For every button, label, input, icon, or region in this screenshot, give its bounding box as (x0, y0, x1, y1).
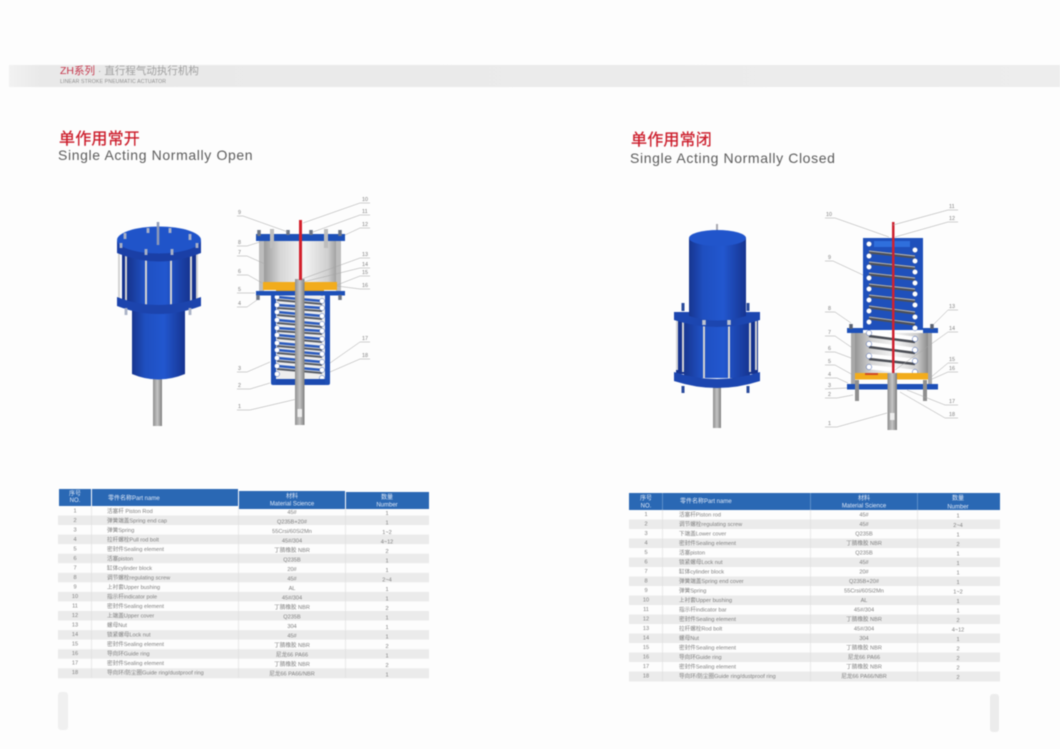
table rows: 45# (859, 560, 870, 566)
table header: 数量 (381, 493, 393, 501)
table rows: 尼龙66 PA66 (848, 653, 880, 661)
table rows: 密封件Sealing element (679, 644, 736, 652)
part callouts: normally open: 12 (362, 222, 368, 228)
part callouts: normally open: 16 (362, 283, 368, 289)
cutaway diagram: normally closed actuator (847, 222, 938, 430)
table header: 材料 (858, 494, 870, 502)
table rows: 指示杆indicator bar (679, 606, 727, 614)
part callouts: normally open: 6 (238, 269, 241, 275)
part callouts: normally open: 9 (238, 210, 241, 216)
table header: 材料 (286, 492, 298, 500)
part callouts: normally closed: 17 (949, 399, 955, 405)
table rows: 15 (72, 642, 78, 648)
table rows: 尼龙66 PA66/NBR (269, 670, 315, 678)
table rows: 45# (859, 512, 870, 518)
table rows: 2 (385, 644, 389, 650)
table rows: 45# (287, 510, 298, 516)
table rows: 弹簧Spring (107, 526, 134, 534)
table rows: 55Crsi/60Si2Mn (272, 529, 312, 535)
table rows: 尼龙66 PA66 (276, 650, 308, 658)
header subtitle: LINEAR STROKE PNEUMATIC ACTUATOR (60, 79, 166, 85)
table header: Material Science (270, 502, 315, 508)
table header: Number (947, 504, 969, 510)
table header (629, 493, 1000, 510)
table rows: 2 (956, 675, 960, 681)
table rows: 45#/304 (282, 538, 302, 544)
table rows: 1 (385, 672, 389, 678)
table header: NO. (70, 498, 81, 504)
table rows: 丁腈橡胶 NBR (274, 660, 310, 668)
table rows: 丁腈橡胶 NBR (274, 546, 310, 554)
table rows: 丁腈橡胶 NBR (846, 539, 882, 547)
part callouts: normally open: 13 (362, 252, 368, 258)
table header: NO. (641, 504, 652, 510)
table rows: 密封件Sealing element (107, 659, 164, 667)
table rows (58, 506, 429, 678)
table rows: Q235B (283, 614, 301, 620)
table rows: 8 (644, 578, 648, 584)
table rows: 1 (956, 552, 960, 558)
part callouts: normally open: 4 (238, 301, 241, 307)
table rows: 密封件Sealing element (107, 545, 164, 553)
table rows: 18 (72, 670, 78, 676)
table rows: 7 (644, 569, 648, 575)
part callouts: normally open: 15 (362, 270, 368, 276)
table rows: 上端盖Upper cover (107, 612, 154, 620)
table rows: 1 (956, 532, 960, 538)
table rows: AL (289, 586, 295, 592)
table rows: 9 (644, 588, 648, 594)
table rows: 密封件Sealing element (107, 602, 164, 610)
table rows: 1 (385, 634, 389, 640)
part callouts: normally open: 7 (238, 250, 241, 256)
table rows: 1 (73, 508, 77, 514)
heading: single acting normally closed: Single Acting Normally Closed (630, 150, 836, 166)
table rows: 11 (72, 604, 78, 610)
table rows: 2 (956, 542, 960, 548)
table rows: 4~12 (952, 628, 964, 634)
table rows: 2 (385, 606, 389, 612)
table rows: 4~12 (381, 540, 393, 546)
table rows: 9 (73, 584, 77, 590)
table rows: 4 (73, 537, 77, 543)
table rows: 45# (287, 634, 298, 640)
product photo: normally open actuator (117, 222, 201, 426)
table rows: 13 (643, 626, 649, 632)
table rows: 丁腈橡胶 NBR (274, 603, 310, 611)
table rows: 拉杆螺栓Rod bolt (679, 624, 723, 632)
table rows: 导向环Guide ring (679, 653, 722, 661)
table header (59, 489, 429, 509)
table rows: 12 (643, 616, 649, 622)
table rows: 缸体cylinder block (679, 568, 724, 576)
table rows: 2 (956, 666, 960, 672)
table rows: 17 (643, 664, 649, 670)
table rows: 4 (644, 540, 648, 546)
table rows: 2 (644, 522, 648, 528)
part callouts: normally open: 10 (362, 197, 368, 203)
table rows: 1 (956, 637, 960, 643)
part callouts: normally closed: 4 (828, 372, 831, 378)
part callouts: normally closed: 9 (828, 255, 831, 261)
heading: single acting normally open: Single Acting Normally Open (58, 147, 253, 163)
table rows: 拉杆螺栓Pull rod bolt (107, 536, 159, 544)
table rows: 活塞杆 Piston Rod (107, 507, 153, 515)
part callouts: normally open: 18 (362, 353, 368, 359)
part callouts: normally closed: 1 (828, 421, 831, 427)
table rows: 13 (72, 622, 78, 628)
table rows: 1 (385, 511, 389, 517)
part callouts: normally open: 3 (238, 366, 241, 372)
table rows: 17 (72, 660, 78, 666)
table rows: 活塞piston (679, 548, 705, 556)
part callouts: normally open: 11 (362, 209, 368, 215)
table rows: 丁腈橡胶 NBR (846, 662, 882, 670)
table rows: 导向环/防尘圈Guide ring/dustproof ring (107, 668, 204, 676)
table rows: 3 (644, 531, 648, 537)
table rows: 45#/304 (854, 608, 874, 614)
table rows: 弹簧Spring (679, 586, 706, 594)
table rows: 弹簧端盖Spring end cover (679, 577, 744, 585)
part callouts: normally closed: 8 (828, 306, 831, 312)
table rows: 上衬套Upper bushing (679, 596, 732, 604)
table rows: 16 (643, 654, 649, 660)
table rows: 导向环Guide ring (107, 650, 150, 658)
product photo: normally closed actuator (674, 224, 760, 428)
cutaway diagram: normally open actuator (256, 220, 345, 425)
part callouts: normally closed: 15 (949, 357, 955, 363)
table rows: 螺母Nut (679, 634, 699, 642)
table rows: 1 (644, 512, 648, 518)
table rows: 7 (73, 566, 77, 572)
table header: Material Science (842, 504, 887, 510)
table rows: 1 (385, 616, 389, 622)
table rows: 2 (385, 549, 389, 555)
table rows: 下端盖Lower cover (679, 530, 726, 538)
part callouts: normally closed: 3 (828, 383, 831, 389)
table rows: 5 (73, 546, 77, 552)
table rows: 2 (956, 656, 960, 662)
table rows: Q235B (855, 532, 873, 538)
parts table: normally open (58, 489, 429, 678)
part callouts: normally open: 2 (238, 383, 241, 389)
part callouts: normally closed: 16 (949, 366, 955, 372)
part callouts: normally closed: 10 (826, 212, 832, 218)
table rows: 锁紧螺母Lock nut (107, 630, 151, 638)
table rows: 45#/304 (282, 596, 302, 602)
table rows: 1 (956, 570, 960, 576)
heading: single acting normally closed: 单作用常闭 (631, 131, 712, 149)
table rows: 1 (385, 596, 389, 602)
table rows: 活塞杆Piston rod (679, 510, 721, 518)
table rows: 6 (73, 556, 77, 562)
table rows: 1 (385, 568, 389, 574)
table rows: 45#/304 (854, 626, 874, 632)
table header: 序号 (640, 494, 652, 502)
table rows: 1~2 (382, 530, 392, 536)
part callouts: normally open: 5 (238, 287, 241, 293)
table rows: 20# (859, 570, 870, 576)
part callouts: normally open (237, 197, 370, 410)
part callouts: normally closed: 18 (949, 412, 955, 418)
part callouts: normally open: 17 (362, 336, 368, 342)
table rows: 2 (385, 663, 389, 669)
table rows: 2~4 (953, 523, 963, 529)
table rows: 1 (385, 587, 389, 593)
part callouts: normally closed: 2 (828, 392, 831, 398)
table rows: 1 (956, 599, 960, 605)
table rows (629, 510, 1000, 682)
table rows: 8 (73, 575, 77, 581)
table rows: 密封件Sealing element (679, 615, 736, 623)
parts table: normally closed (629, 493, 1000, 682)
part callouts: normally closed: 12 (949, 216, 955, 222)
table rows: 15 (643, 645, 649, 651)
table rows: 丁腈橡胶 NBR (846, 615, 882, 623)
table rows: 1 (956, 608, 960, 614)
part callouts: normally closed: 11 (949, 204, 955, 210)
part callouts: normally closed: 7 (828, 330, 831, 336)
table rows: 10 (643, 598, 649, 604)
table rows: 活塞piston (107, 554, 133, 562)
table rows: 尼龙66 PA66/NBR (841, 672, 887, 680)
table rows: 2 (956, 618, 960, 624)
table rows: 18 (643, 674, 649, 680)
table rows: 锁紧螺母Lock nut (679, 558, 723, 566)
heading: single acting normally open (58, 130, 253, 163)
table rows: 20# (287, 567, 298, 573)
part callouts: normally closed: 13 (949, 304, 955, 310)
part callouts: normally open: 1 (238, 404, 241, 410)
table rows: 缸体cylinder block (107, 564, 152, 572)
part callouts: normally closed (825, 204, 958, 427)
page edge mark: left (58, 692, 68, 730)
table rows: 上衬套Upper bushing (107, 583, 160, 591)
part callouts: normally closed: 6 (828, 346, 831, 352)
table rows: Q235B+20# (277, 520, 308, 526)
table rows: 丁腈橡胶 NBR (846, 644, 882, 652)
table rows: 45# (287, 576, 298, 582)
table rows: 1 (385, 654, 389, 660)
table rows: 弹簧端盖Spring end cap (107, 516, 167, 524)
part callouts: normally open: 14 (362, 262, 368, 268)
table rows: 螺母Nut (107, 621, 127, 629)
table rows: 调节螺栓regulating screw (679, 520, 743, 528)
table rows: 55Crsi/60Si2Mn (844, 588, 884, 594)
table rows: 密封件Sealing element (679, 539, 736, 547)
table rows: Q235B (855, 550, 873, 556)
table rows: 2 (73, 518, 77, 524)
table rows: 10 (72, 594, 78, 600)
table rows: 1~2 (953, 590, 963, 596)
table rows: 304 (859, 636, 869, 642)
table rows: 1 (385, 558, 389, 564)
part callouts: normally closed: 14 (949, 326, 955, 332)
table rows: AL (861, 598, 867, 604)
part callouts: normally open: 8 (238, 240, 241, 246)
table rows: 1 (385, 625, 389, 631)
table rows: 密封件Sealing element (679, 662, 736, 670)
table rows: Q235B+20# (849, 579, 880, 585)
table rows: 1 (385, 520, 389, 526)
heading: single acting normally closed (630, 131, 836, 166)
header title: ZH系列 · 直行程气动执行机构 (60, 64, 199, 77)
page edge mark: right (990, 694, 999, 732)
table rows: 调节螺栓regulating screw (107, 574, 171, 582)
table rows: 导向环/防尘圈Guide ring/dustproof ring (679, 672, 776, 680)
table rows: 5 (644, 550, 648, 556)
table rows: 1 (956, 514, 960, 520)
table rows: Q235B (283, 558, 301, 564)
table rows: 14 (72, 632, 78, 638)
table rows: 45# (859, 522, 870, 528)
table rows: 6 (644, 560, 648, 566)
table header: 序号 (69, 490, 81, 498)
part callouts: normally closed: 5 (828, 359, 831, 365)
table rows: 14 (643, 636, 649, 642)
table rows: 1 (956, 561, 960, 567)
table rows: 3 (73, 528, 77, 534)
table header: 零件名称Part name (108, 494, 160, 502)
header band (9, 64, 1060, 87)
table rows: 指示杆indicator pole (107, 592, 157, 600)
heading: single acting normally open: 单作用常开 (59, 130, 140, 148)
table rows: 丁腈橡胶 NBR (274, 641, 310, 649)
table rows: 密封件Sealing element (107, 640, 164, 648)
table rows: 2~4 (382, 578, 392, 584)
table rows: 16 (72, 651, 78, 657)
table header: Number (376, 502, 398, 508)
table header: 数量 (952, 494, 964, 502)
table rows: 1 (956, 580, 960, 586)
table header: 零件名称Part name (680, 497, 732, 505)
table rows: 12 (72, 613, 78, 619)
table rows: 304 (287, 624, 297, 630)
table rows: 11 (643, 607, 649, 613)
table rows: 2 (956, 646, 960, 652)
